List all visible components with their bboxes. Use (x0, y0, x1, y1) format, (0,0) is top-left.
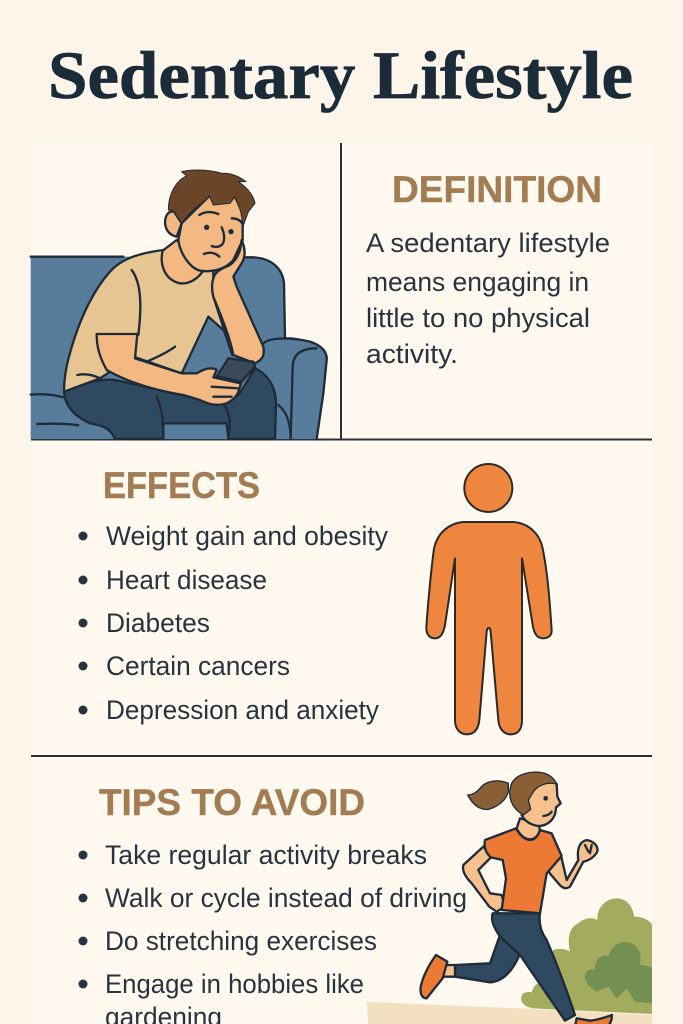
propping arm (212, 240, 264, 363)
jeans (64, 368, 276, 439)
facial features (199, 212, 243, 257)
eye and smile (543, 796, 552, 816)
bushes (521, 898, 652, 1014)
tips heading: TIPS TO AVOID (99, 782, 365, 823)
effects list: Certain cancers (106, 651, 290, 681)
definition text: little to no physical (366, 303, 590, 333)
effects heading: EFFECTS (103, 465, 260, 506)
front leg and foot (492, 913, 612, 1024)
ground path (367, 1002, 652, 1024)
face (178, 196, 243, 271)
icon: orange human figure (426, 464, 552, 734)
definition heading: DEFINITION (392, 169, 602, 210)
orange t-shirt (485, 828, 562, 913)
tips list (78, 840, 467, 1024)
hair (168, 170, 255, 227)
back arm (463, 847, 505, 912)
definition text: means engaging in (366, 267, 589, 297)
sofa (31, 257, 327, 439)
back leg (455, 935, 520, 982)
face (522, 778, 561, 826)
tips list: Take regular activity breaks (105, 840, 427, 870)
effects list (78, 521, 388, 725)
definition text (366, 228, 610, 369)
hair (510, 772, 557, 815)
tips list: Engage in hobbies like (105, 969, 364, 999)
phone (217, 358, 255, 382)
definition text: A sedentary lifestyle (366, 228, 610, 258)
title: Sedentary Lifestyle (48, 37, 633, 113)
effects list: Weight gain and obesity (106, 521, 388, 551)
definition text: activity. (366, 339, 458, 369)
tips list: Do stretching exercises (105, 926, 377, 956)
ponytail (468, 781, 508, 809)
neck (162, 240, 203, 283)
back foot (421, 955, 455, 998)
illustration: woman jogging past bushes (367, 772, 652, 1024)
content panel background (31, 143, 652, 1024)
t-shirt (64, 247, 232, 392)
front arm and fist (548, 840, 598, 888)
ear (165, 211, 182, 237)
neck (517, 818, 540, 839)
effects list: Depression and anxiety (106, 695, 379, 725)
illustration: man slumped on sofa with phone (31, 170, 327, 439)
effects list: Heart disease (106, 565, 267, 595)
tips list: Walk or cycle instead of driving (105, 883, 467, 913)
forearm and hand (97, 334, 241, 405)
effects list: Diabetes (106, 608, 210, 638)
